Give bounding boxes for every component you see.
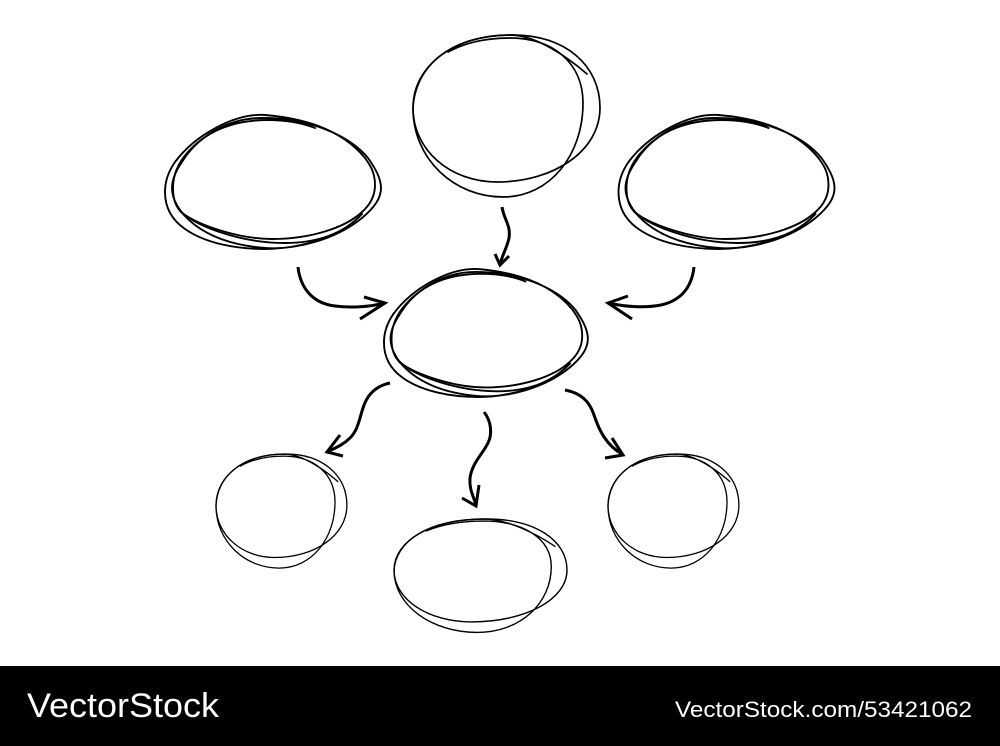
- arrow: left to center: [298, 267, 385, 319]
- watermark bar: [0, 666, 1000, 746]
- arrow: center to bottom: [462, 412, 491, 506]
- upper right ellipse: [618, 115, 834, 249]
- lower left circle: [216, 454, 347, 568]
- arrows: [298, 207, 694, 506]
- upper left ellipse: [165, 115, 381, 249]
- arrow: center to lower left: [327, 383, 390, 456]
- lower right circle: [608, 454, 739, 568]
- arrow: center to lower right: [565, 390, 623, 458]
- arrow: right to center: [608, 267, 694, 319]
- arrow: top to center: [495, 207, 509, 265]
- brand name: VectorStock: [27, 687, 220, 725]
- top circle: [413, 35, 600, 197]
- image url: VectorStock.com/53421062: [675, 697, 972, 722]
- center ellipse: [384, 269, 588, 397]
- bottom circle: [394, 519, 567, 632]
